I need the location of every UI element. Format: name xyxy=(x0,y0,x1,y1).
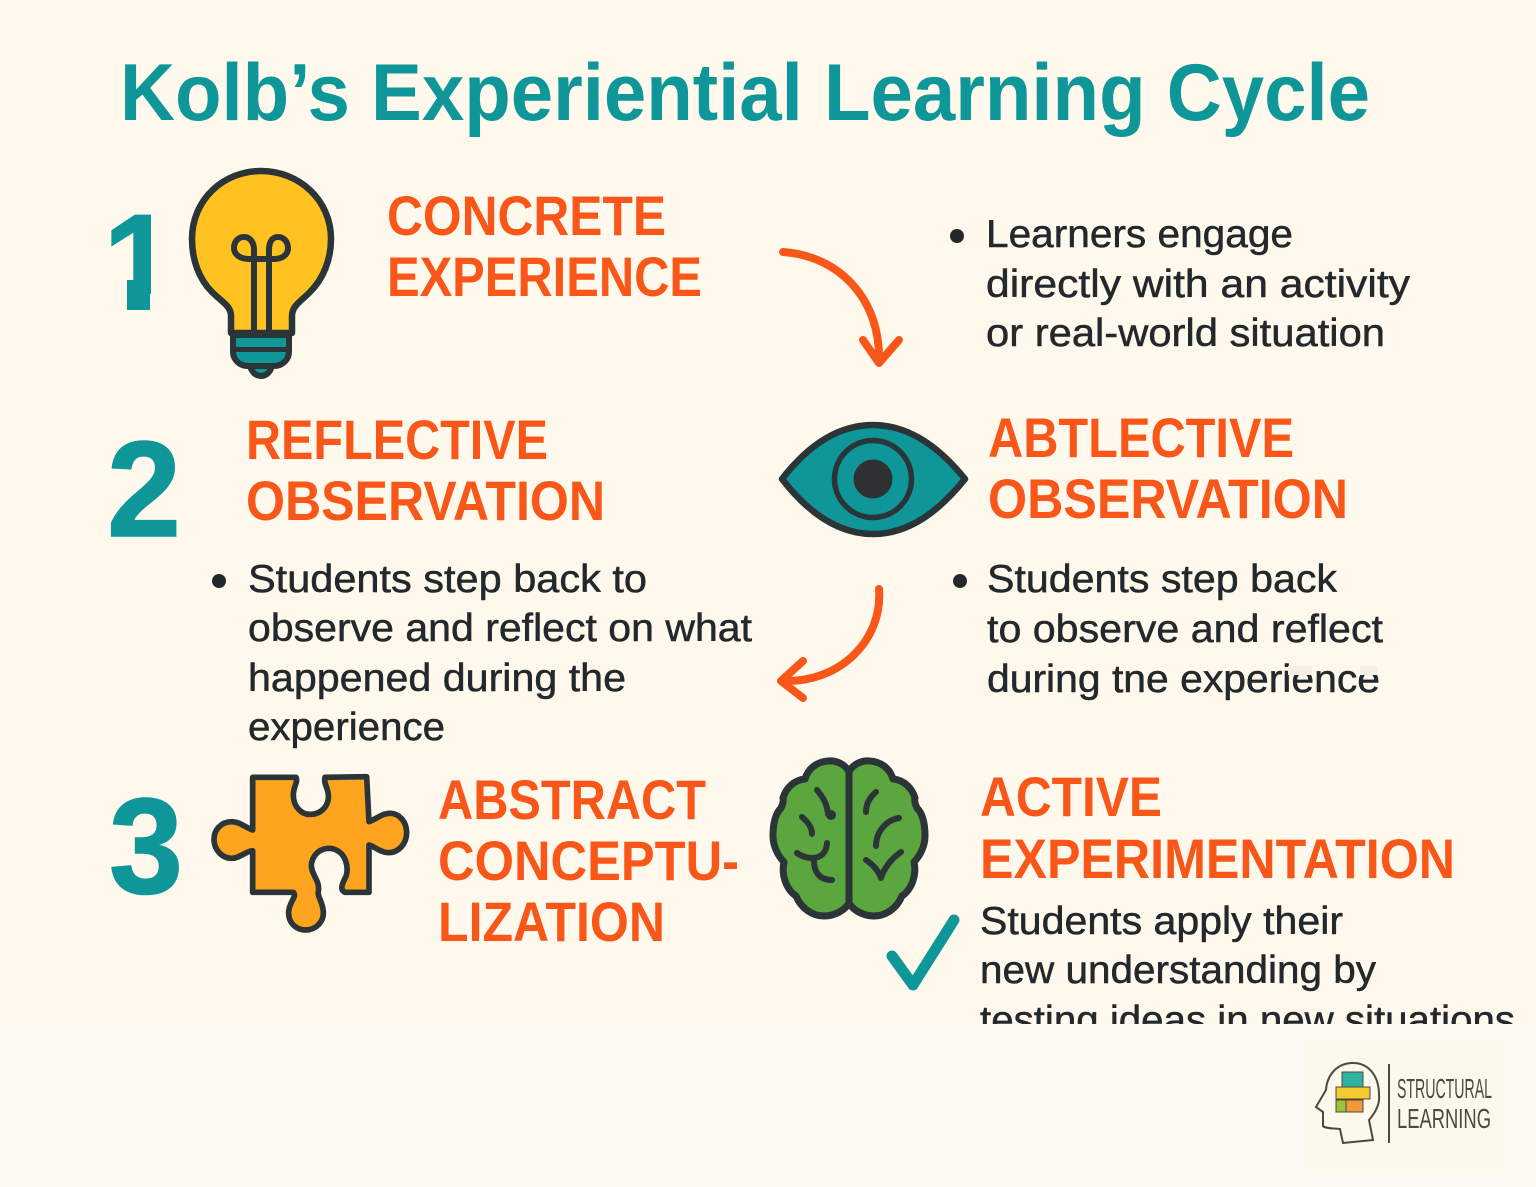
text block: students step back to observe: Students step back to xyxy=(248,558,647,601)
heading: concrete experience xyxy=(387,184,702,308)
step number 3: 3 xyxy=(109,770,183,922)
text block: students step back to observe: observe and reflect on what xyxy=(248,607,752,650)
bottom strip xyxy=(0,1024,1536,1187)
text block: students step back during xyxy=(953,558,1383,701)
text block: students apply: testing ideas in new situations xyxy=(980,999,1515,1042)
text block: learners engage: or real-world situation xyxy=(986,312,1385,355)
text block: learners engage: Learners engage xyxy=(986,213,1293,256)
text block: students step back during: to observe and reflect xyxy=(987,608,1383,651)
icon: light bulb xyxy=(192,171,331,376)
text block: students apply: new understanding by xyxy=(980,949,1377,992)
icon: puzzle piece xyxy=(214,777,407,930)
text block: students apply: Students apply their xyxy=(980,900,1343,943)
logo: structural learning xyxy=(1307,1040,1506,1172)
text block: students step back to observe: experience xyxy=(248,706,445,749)
step number 1: 1 xyxy=(103,186,177,338)
text block: students step back during: during tne experience xyxy=(987,658,1380,701)
heading: abstract conceptualization: ABSTRACT xyxy=(438,768,706,831)
icon: eye xyxy=(782,425,965,534)
heading: abtlective observation xyxy=(988,406,1348,530)
heading: abtlective observation: ABTLECTIVE xyxy=(988,406,1294,469)
heading: reflective observation xyxy=(246,408,605,532)
heading: concrete experience: EXPERIENCE xyxy=(387,245,702,308)
heading: reflective observation: OBSERVATION xyxy=(246,469,605,532)
heading: active experimentation: EXPERIMENTATION xyxy=(980,827,1455,890)
icon: brain xyxy=(773,761,925,916)
heading: abstract conceptualization: LIZATION xyxy=(438,890,665,953)
text block: students step back to observe: happened during the xyxy=(248,657,626,700)
text block: students step back during: Students step back xyxy=(987,558,1338,601)
text block: students apply xyxy=(980,900,1515,1042)
heading: concrete experience: CONCRETE xyxy=(387,184,666,247)
text block: students step back to observe xyxy=(212,558,752,749)
heading: abstract conceptualization: CONCEPTU- xyxy=(438,829,739,892)
text block: learners engage xyxy=(950,213,1411,355)
arrow: concrete experience to observation xyxy=(783,252,899,363)
heading: reflective observation: REFLECTIVE xyxy=(246,408,548,471)
arrow: observation to reflective xyxy=(781,589,879,698)
heading: active experimentation xyxy=(980,765,1455,890)
icon: check mark xyxy=(892,920,954,985)
heading: abstract conceptualization xyxy=(438,768,739,953)
step number 1 xyxy=(111,214,151,310)
text block: learners engage: directly with an activity xyxy=(986,263,1411,306)
logo: structural learning: LEARNING xyxy=(1397,1103,1491,1134)
title: Kolb’s Experiential Learning Cycle xyxy=(120,48,1370,138)
step number 2: 2 xyxy=(107,413,181,565)
heading: active experimentation: ACTIVE xyxy=(980,765,1162,828)
heading: abtlective observation: OBSERVATION xyxy=(988,467,1348,530)
